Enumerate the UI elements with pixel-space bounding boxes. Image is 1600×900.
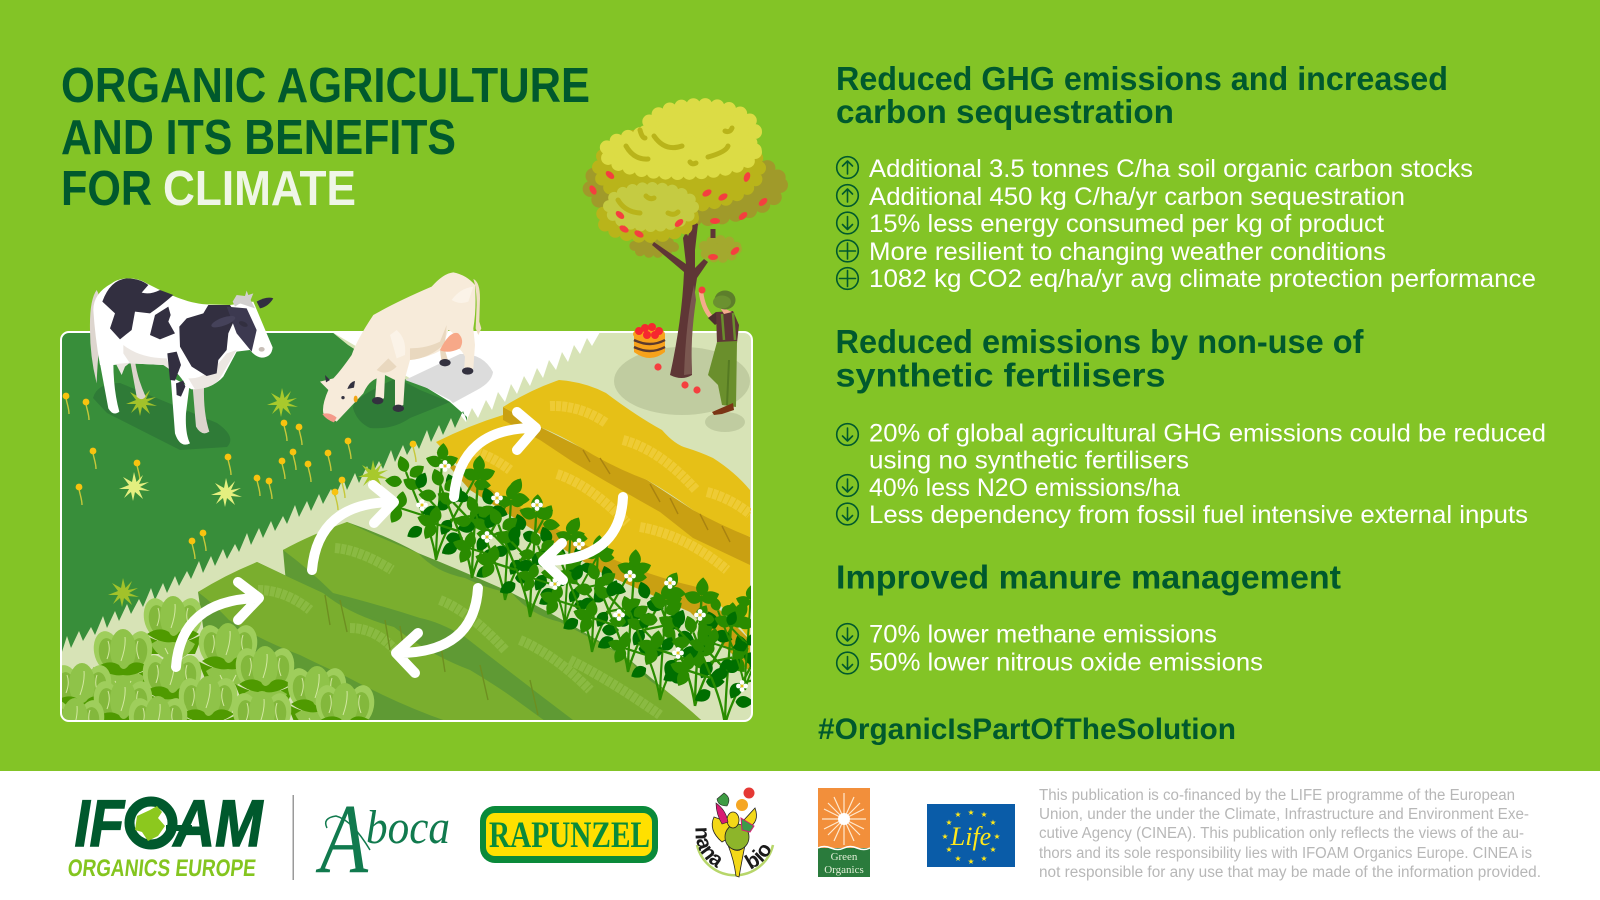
- logo: Rapunzel: RAPUNZEL: [489, 815, 650, 856]
- logo: LIFE programme: ★: [968, 808, 975, 817]
- section: improved manure management: [836, 560, 1341, 676]
- white farmyard patch: [332, 332, 600, 422]
- logo: LIFE programme: ★: [946, 818, 953, 827]
- bullet list: [869, 620, 1263, 676]
- tree shadow: [614, 347, 750, 415]
- disclaimer text: This publication is co-financed by the LIFE programme of the European: [1039, 787, 1515, 804]
- cow shadows: [93, 354, 493, 450]
- canopy top: [605, 105, 755, 226]
- title: [61, 59, 590, 216]
- bullet list: Less dependency from fossil fuel intensive external inputs: [869, 501, 1528, 529]
- heading: Reduced GHG emissions and increased: [836, 61, 1448, 98]
- bullet list: 70% lower methane emissions: [869, 620, 1217, 648]
- icon: cream cow: [320, 272, 481, 422]
- hay rows: [436, 380, 750, 672]
- logo: LIFE programme: ★: [955, 854, 962, 863]
- field ground and crops: [62, 333, 751, 720]
- cycle arrows: [176, 412, 623, 673]
- bullet list: 1082 kg CO2 eq/ha/yr avg climate protection performance: [869, 265, 1536, 293]
- logo: IFOAM Organics Europe: [66, 787, 269, 882]
- logo: LIFE programme: ★: [968, 857, 975, 866]
- logo: LIFE programme: Life: [950, 822, 991, 851]
- hashtag: #OrganicIsPartOfTheSolution: [818, 713, 1236, 746]
- logo: IFOAM Organics Europe: ORGANICS EUROPE: [66, 855, 257, 882]
- bullet list: 20% of global agricultural GHG emissions could be reduced: [869, 420, 1546, 448]
- bullet list: More resilient to changing weather conditions: [869, 238, 1386, 266]
- heading: synthetic fertilisers: [836, 358, 1166, 394]
- logo: Green Organics: [818, 788, 870, 877]
- pasture flowers: [63, 387, 416, 607]
- logo: Rapunzel: [480, 806, 658, 863]
- title: ORGANIC AGRICULTURE: [61, 59, 590, 113]
- lettuce rows: [62, 596, 374, 720]
- footer band: [0, 771, 1600, 900]
- bullet list: 15% less energy consumed per kg of product: [869, 210, 1384, 238]
- disclaimer text: Union, under the under the Climate, Infrastructure and Environment Exe-: [1039, 806, 1529, 823]
- logo: LIFE programme: [927, 804, 1015, 867]
- logo: LIFE programme: ★: [990, 818, 997, 827]
- bullet list: [869, 155, 1536, 293]
- heading: Improved manure management: [836, 560, 1341, 596]
- heading: Reduced emissions by non-use of: [836, 324, 1364, 361]
- canopy back: [590, 151, 780, 258]
- disclaimer text: not responsible for any use that may be made of the information provided.: [1039, 864, 1541, 881]
- icon: farmer picking apple: [698, 286, 739, 415]
- heading: [836, 324, 1364, 394]
- title: FOR: [61, 162, 152, 216]
- icon: apple basket: [633, 323, 701, 394]
- bullet list: using no synthetic fertilisers: [869, 446, 1189, 474]
- heading: [836, 61, 1448, 131]
- logo: LIFE programme: ★: [942, 832, 949, 841]
- disclaimer text: [1039, 787, 1541, 881]
- logo: nana bio: [695, 788, 774, 878]
- bullet list: 50% lower nitrous oxide emissions: [869, 648, 1263, 676]
- divider: [292, 795, 294, 880]
- section: reduced emissions by non-use of synthetic fertilisers: [836, 324, 1546, 529]
- disclaimer text: cutive Agency (CINEA). This publication only reflects the views of the au-: [1039, 825, 1524, 842]
- green crop rows: [198, 522, 740, 721]
- pasture: [61, 332, 467, 655]
- logo: IFOAM Organics Europe: IF: [70, 787, 129, 861]
- bullet list: [869, 420, 1546, 529]
- canopy mid: [599, 130, 759, 236]
- logo: LIFE programme: ★: [990, 845, 997, 854]
- logo: Aboca: [315, 783, 450, 894]
- logo: LIFE programme: ★: [955, 810, 962, 819]
- plants with white flowers: [385, 443, 751, 720]
- illustration: farm panel: [43, 105, 795, 760]
- title: AND ITS BENEFITS: [61, 111, 456, 165]
- logo: LIFE programme: ★: [946, 845, 953, 854]
- icon: holstein cow: [90, 278, 273, 445]
- section: reduced GHG emissions and carbon sequestration: [836, 61, 1536, 293]
- logo: IFOAM Organics Europe: AM: [169, 787, 269, 861]
- logo: LIFE programme: ★: [981, 810, 988, 819]
- title: CLIMATE: [163, 162, 356, 216]
- icon: apple tree: [588, 105, 780, 378]
- logo: Green Organics: Organics: [824, 864, 864, 876]
- bullet list: Additional 450 kg C/ha/yr carbon sequestration: [869, 183, 1405, 211]
- logo: nana bio: nana: [695, 828, 721, 868]
- logo: LIFE programme: ★: [994, 832, 1001, 841]
- icons: up, up, down, plus, plus: [837, 157, 858, 289]
- apples on tree: [588, 169, 769, 260]
- logo: Aboca: A: [315, 783, 369, 894]
- logo: LIFE programme: ★: [981, 854, 988, 863]
- canopy shading: [618, 128, 732, 214]
- bullet list: Additional 3.5 tonnes C/ha soil organic carbon stocks: [869, 155, 1473, 183]
- bullet list: 40% less N2O emissions/ha: [869, 474, 1180, 502]
- logo: Aboca: boca: [366, 801, 450, 854]
- icons: down arrows: [837, 624, 858, 674]
- logo: Green Organics: Green: [831, 851, 858, 863]
- disclaimer text: thors and its sole responsibility lies with IFOAM Organics Europe. CINEA is: [1039, 845, 1532, 862]
- logo: nana bio: bio: [744, 845, 770, 870]
- heading: carbon sequestration: [836, 94, 1174, 131]
- icons: down arrows: [837, 424, 858, 525]
- trunk: [652, 222, 708, 378]
- panel border: [61, 332, 752, 721]
